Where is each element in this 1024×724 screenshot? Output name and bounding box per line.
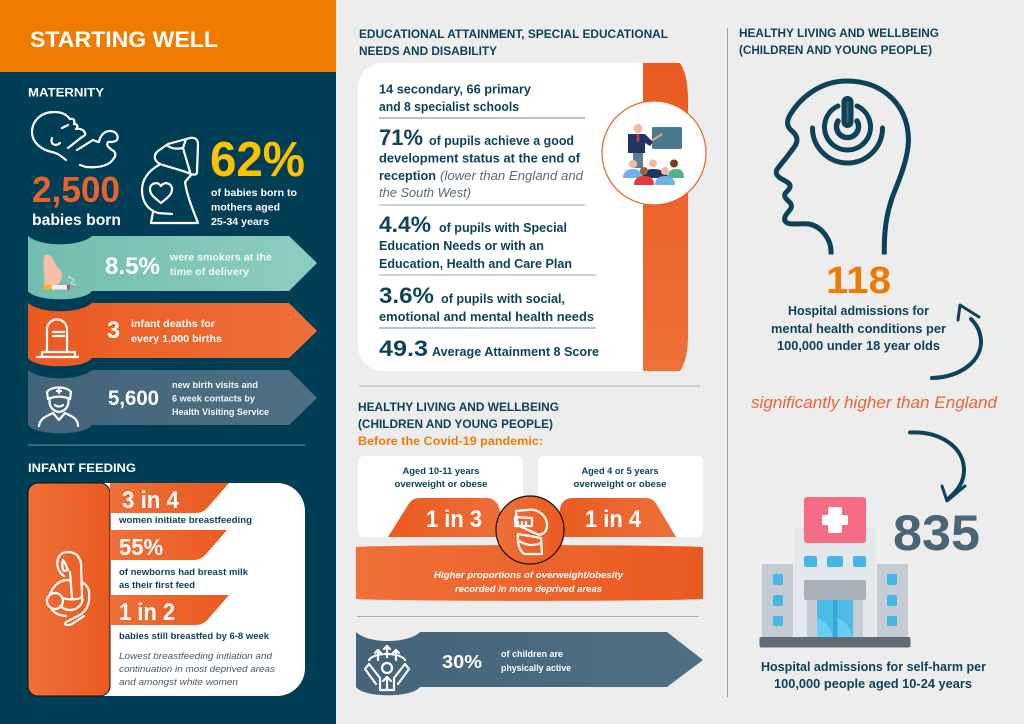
stat: 2,500: 2,500 xyxy=(32,169,120,210)
text: schools: 14 secondary, 66 primary xyxy=(379,82,531,96)
stat: 4.4%: Education Needs or with an xyxy=(379,239,544,253)
text: smokers: were smokers at the xyxy=(169,252,272,264)
text: health visits: 6 week contacts by xyxy=(172,394,256,404)
card: aged 4 or 5: Aged 4 or 5 years xyxy=(582,466,658,477)
stat: 3.6%: 3.6% xyxy=(379,283,434,308)
callout: 3 in 4: 3 in 4 xyxy=(122,487,180,514)
icon: breastfeeding mother xyxy=(47,552,89,625)
stat: 49.3: 49.3 xyxy=(379,336,428,361)
stat: 4.4%: Education, Health and Care Plan xyxy=(379,257,572,271)
text: deprivation note: continuation in most deprived areas xyxy=(119,664,275,675)
callout: 3 in 4: women initiate breastfeeding xyxy=(118,515,252,526)
text: infant deaths: every 1,000 births xyxy=(131,333,222,345)
text: infant deaths: infant deaths for xyxy=(131,318,215,330)
text: health visits xyxy=(172,380,269,418)
icon: gravestone xyxy=(37,320,78,357)
heading: healthy living right column: (CHILDREN AND YOUNG PEOPLE) xyxy=(739,45,932,57)
icon: nurse xyxy=(39,388,78,426)
text: self-harm admissions: Hospital admissions for self-harm per xyxy=(761,660,986,674)
text: physically active xyxy=(501,649,571,674)
icon: pregnant woman xyxy=(142,138,198,223)
card: aged 4 or 5: overweight or obese xyxy=(574,479,666,490)
label: babies born: babies born xyxy=(32,212,121,229)
band: deprivation note: recorded in more deprived areas xyxy=(455,584,602,595)
heading: educational attainment: NEEDS AND DISABILITY xyxy=(359,46,497,58)
icon: teacher and pupils xyxy=(602,101,706,205)
heading: healthy living before covid: (CHILDREN AND YOUNG PEOPLE) xyxy=(358,419,553,431)
text: smokers xyxy=(169,252,272,278)
stat: 118: 118 xyxy=(826,260,891,302)
heading: infant feeding: INFANT FEEDING xyxy=(28,461,136,475)
orange side tab xyxy=(28,483,110,696)
text: health visits: Health Visiting Service xyxy=(172,407,269,418)
stat: 3.6%: emotional and mental health needs xyxy=(379,310,594,324)
title banner: Starting Well xyxy=(0,0,336,72)
text: physically active: physically active xyxy=(501,663,571,674)
callout: 55%: 55% xyxy=(119,534,163,560)
stat: 4.4%: 4.4% xyxy=(379,212,431,237)
card: aged 10-11: 1 in 3 xyxy=(426,506,482,533)
stat: 71% xyxy=(379,125,584,200)
stat: 4.4%: of pupils with Special xyxy=(439,221,567,235)
text: mothers aged xyxy=(211,187,297,228)
text: mothers aged: mothers aged xyxy=(211,202,280,214)
icon: head with power symbol xyxy=(776,81,908,254)
heading: educational attainment xyxy=(359,29,668,58)
band: deprivation note: Higher proportions of overweight/obesity xyxy=(434,570,624,581)
arrow: curved up xyxy=(932,305,981,378)
orange side band xyxy=(643,63,688,371)
panel: infant feeding xyxy=(28,483,305,696)
heading: healthy living right column xyxy=(739,28,939,57)
text: health visits: new birth visits and xyxy=(172,380,258,391)
band: deprivation note xyxy=(356,545,703,601)
callout: 1 in 2: babies still breastfed by 6-8 week xyxy=(119,631,270,642)
card: aged 4 or 5: 1 in 4 xyxy=(585,506,642,533)
arrow banner: physically active xyxy=(356,632,703,695)
callout: 1 in 2 xyxy=(110,595,270,642)
arrow banner: infant deaths xyxy=(28,303,317,366)
stat: 62%: 62% xyxy=(210,133,305,187)
stat: 71%: (lower than England and xyxy=(440,169,584,183)
callout: 55%: of newborns had breast milk xyxy=(119,567,249,578)
card: aged 10-11: Aged 10-11 years xyxy=(402,466,480,477)
arrow: curved down xyxy=(910,432,965,501)
callout: 55% xyxy=(110,530,249,591)
stat: 49.3 xyxy=(379,336,599,361)
heading: educational attainment: EDUCATIONAL ATTAINMENT, SPECIAL EDUCATIONAL xyxy=(359,29,668,41)
text: physically active: of children are xyxy=(501,649,563,660)
stat: 49.3: Average Attainment 8 Score xyxy=(432,345,599,359)
text: schools: and 8 specialist schools xyxy=(379,100,519,114)
text: schools xyxy=(379,82,531,114)
heading: maternity: MATERNITY xyxy=(28,86,104,100)
heading: healthy living before covid xyxy=(358,402,559,448)
arrow banner: smokers xyxy=(28,236,317,299)
card: aged 4 or 5 xyxy=(538,456,703,537)
text: infant deaths xyxy=(131,318,222,345)
text: mothers aged: 25-34 years xyxy=(211,216,269,228)
panel: education statistics xyxy=(358,63,706,371)
stat: 835: 835 xyxy=(893,505,980,561)
stat: 71%: development status at the end of xyxy=(379,152,581,166)
heading: healthy living right column: HEALTHY LIVING AND WELLBEING xyxy=(739,28,939,40)
text: self-harm admissions: 100,000 people aged 10-24 years xyxy=(774,677,972,691)
stat: 5,600: 5,600 xyxy=(108,387,159,410)
stat: 3.6% xyxy=(379,283,594,324)
text: mothers aged: of babies born to xyxy=(211,187,297,199)
callout: 55%: as their first feed xyxy=(119,580,195,591)
text: mental health admissions: mental health conditions per xyxy=(771,322,946,336)
callout: 3 in 4 xyxy=(110,483,252,526)
stat: 3: 3 xyxy=(107,317,120,344)
callout: 1 in 2: 1 in 2 xyxy=(119,599,175,626)
stat: 8.5%: 8.5% xyxy=(105,253,160,280)
heading: healthy living before covid: HEALTHY LIVING AND WELLBEING xyxy=(358,402,559,414)
icon: active child xyxy=(365,646,409,690)
icon: measuring tape on body xyxy=(496,496,564,564)
panel: maternity xyxy=(28,86,305,229)
text: smokers: time of delivery xyxy=(170,266,249,278)
icon: hospital xyxy=(760,497,910,648)
card: aged 10-11 xyxy=(358,456,523,537)
panel: left navy column xyxy=(0,0,336,724)
card: aged 10-11: overweight or obese xyxy=(394,479,488,490)
text: mental health admissions: 100,000 under 18 year olds xyxy=(777,339,940,353)
stat: 30%: 30% xyxy=(442,652,482,672)
stat: 4.4% xyxy=(379,212,572,271)
arrow banner: health visits xyxy=(28,370,317,433)
text: significantly higher: significantly higher than England xyxy=(751,393,998,412)
stat: 71%: reception xyxy=(379,169,436,183)
icon: baby xyxy=(32,112,118,167)
panel: overweight or obese comparison xyxy=(356,456,703,601)
text: deprivation note xyxy=(119,651,275,688)
stat: 71%: 71% xyxy=(379,125,423,150)
stat: 71%: of pupils achieve a good xyxy=(429,134,574,148)
stat: 71%: the South West) xyxy=(379,186,471,200)
text: deprivation note: and amongst white women xyxy=(119,677,238,688)
text: mental health admissions: Hospital admissions for xyxy=(788,304,929,318)
stat: 3.6%: of pupils with social, xyxy=(441,292,565,306)
text: self-harm admissions xyxy=(761,660,986,691)
icon: pregnant smoker xyxy=(43,255,76,290)
title banner: Starting Well: STARTING WELL xyxy=(30,27,218,52)
heading: healthy living before covid: Before the Covid-19 pandemic: xyxy=(358,434,543,448)
text: mental health admissions xyxy=(771,304,946,353)
text: deprivation note: Lowest breastfeeding initiation and xyxy=(119,651,273,662)
